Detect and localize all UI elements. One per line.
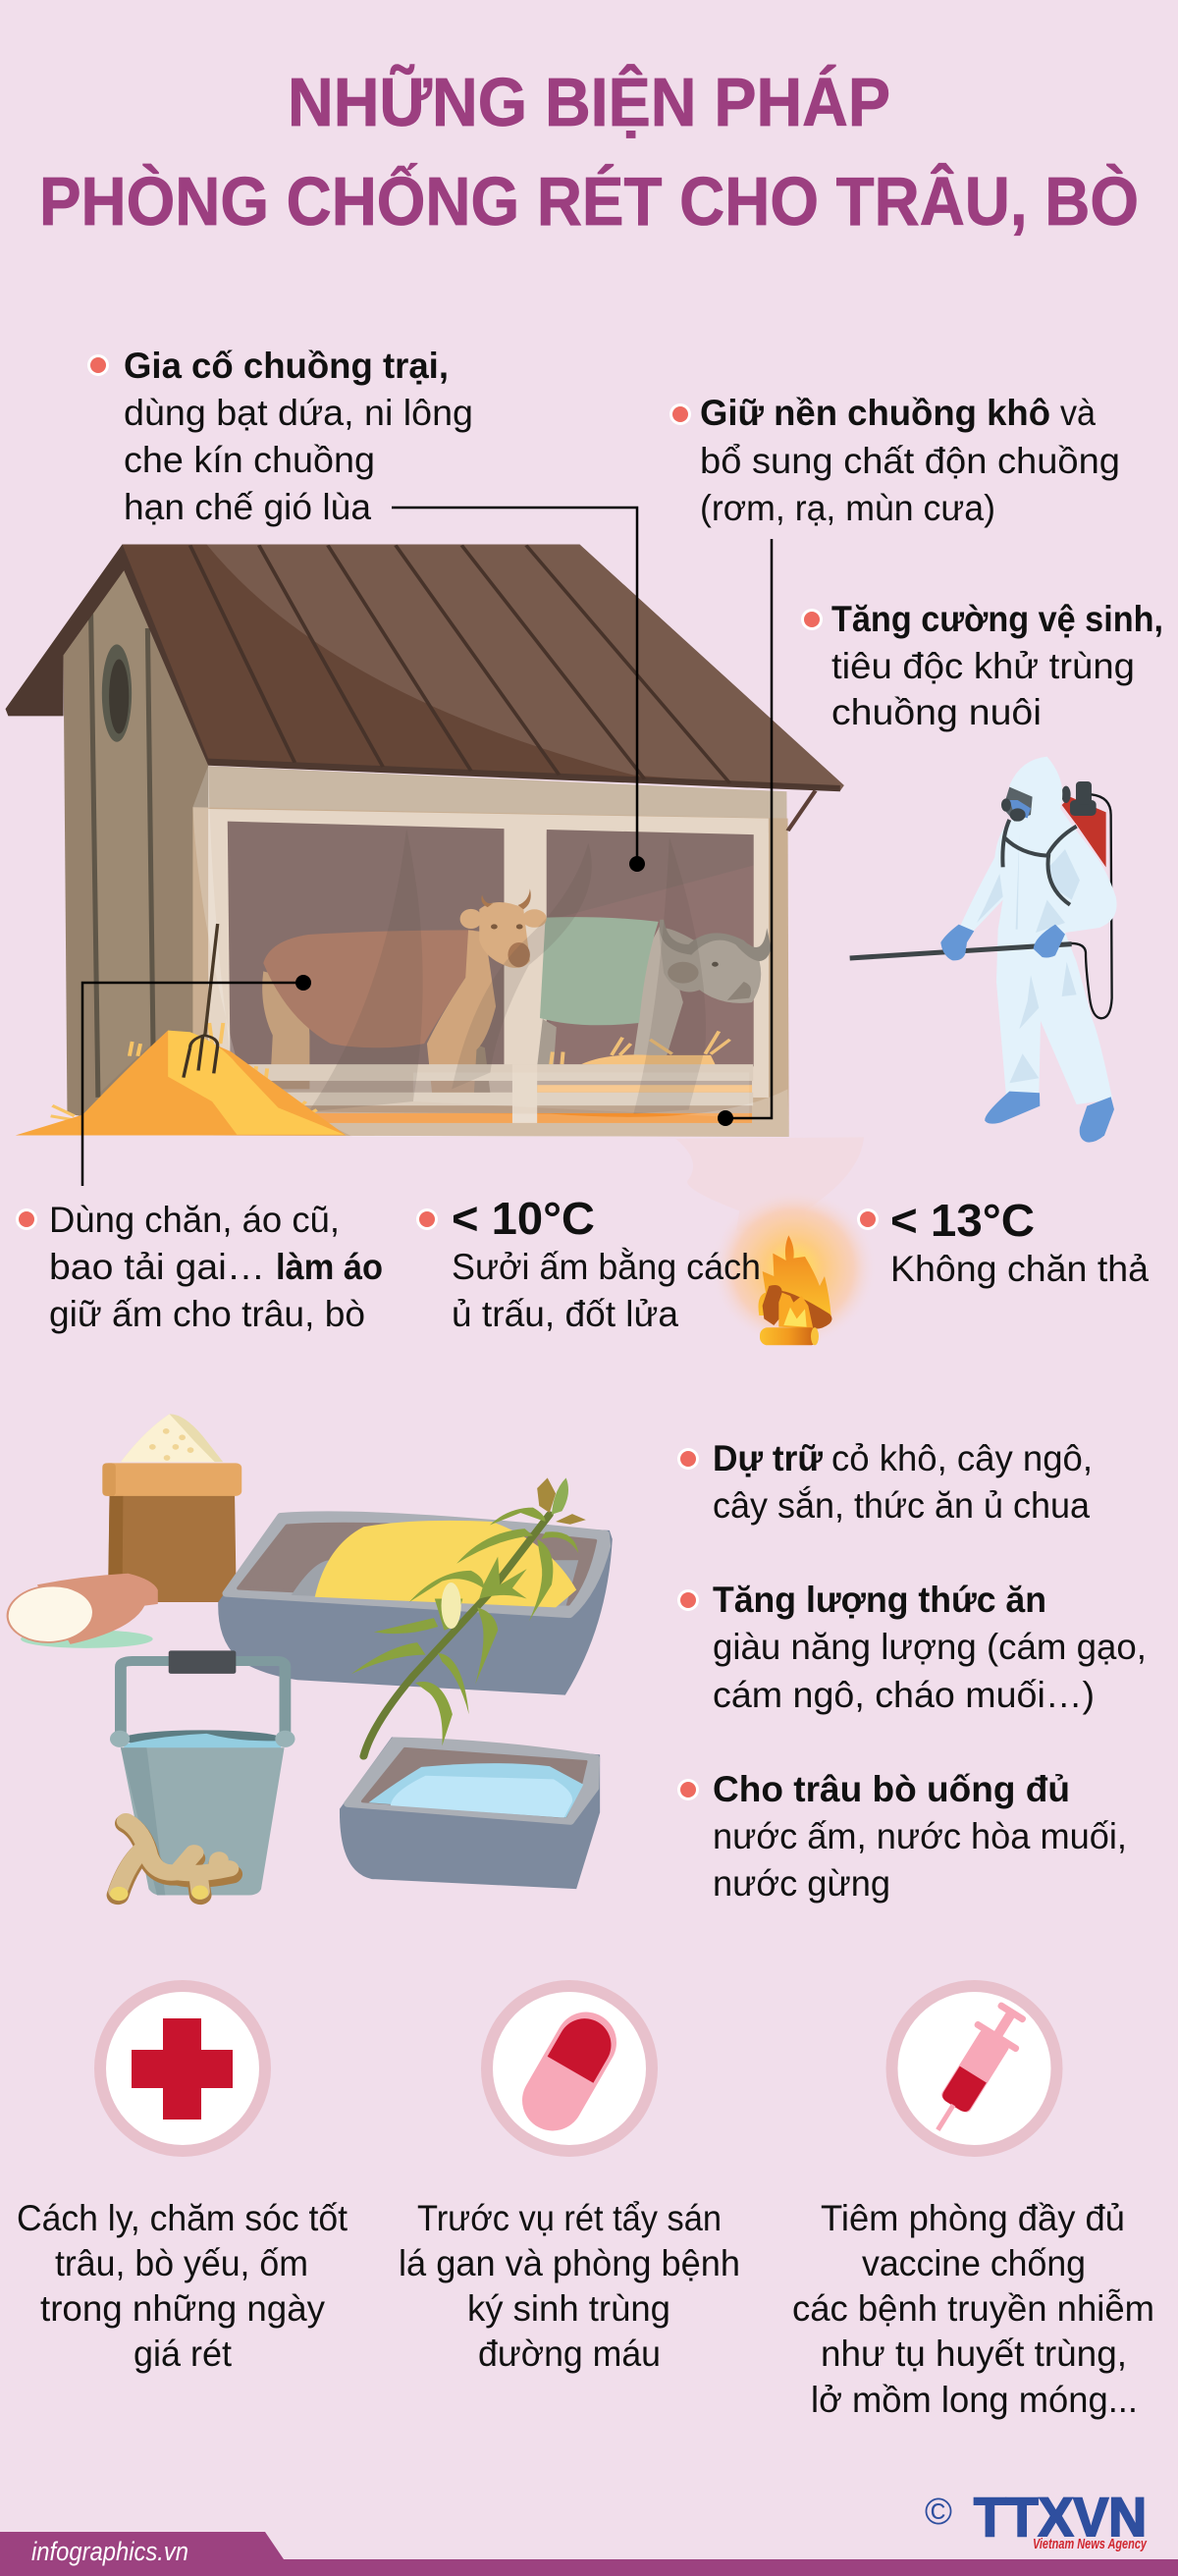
cow <box>262 888 547 1098</box>
glow <box>710 1188 877 1348</box>
mask <box>1003 787 1033 822</box>
large feed tray <box>218 1513 613 1695</box>
connector: reinforce barn <box>392 508 645 872</box>
text: keep floor dry: và <box>1060 393 1096 433</box>
text: reinforce barn: Gia cố chuồng trại, <box>124 346 449 386</box>
text: blankets for animals: bao tải gai… <box>49 1247 265 1287</box>
text: vaccinate: vaccine chống <box>862 2243 1086 2283</box>
text: reinforce barn: dùng bạt dứa, ni lông <box>124 393 473 433</box>
sprayer hose <box>1071 794 1112 1018</box>
text: reinforce barn: hạn chế gió lùa <box>124 487 371 527</box>
title: NHỮNG BIỆN PHÁP <box>288 63 890 140</box>
text: keep floor dry: (rơm, rạ, mùn cưa) <box>700 488 995 528</box>
text: blankets for animals: làm áo <box>276 1247 383 1287</box>
illustration: worker in protective suit spraying <box>850 757 1117 1143</box>
text: blankets for animals <box>16 1200 383 1334</box>
footer bar: infographics.vn <box>31 2537 188 2566</box>
boots <box>985 1092 1040 1124</box>
sweet potato <box>4 1574 158 1648</box>
straw under buffalo <box>581 1054 717 1066</box>
text: deworm: lá gan và phòng bệnh <box>399 2243 740 2283</box>
text: reinforce barn <box>87 346 473 527</box>
barn windows <box>228 822 504 1066</box>
text: sanitation <box>801 599 1163 732</box>
icon: red cross <box>100 1986 265 2151</box>
fence <box>237 1064 753 1123</box>
sack of bran <box>102 1414 241 1602</box>
connector: blankets <box>82 975 311 1186</box>
gloves <box>940 925 974 960</box>
icon: syringe <box>891 1986 1056 2151</box>
text: enough water <box>677 1769 1127 1904</box>
text: deworm: đường máu <box>478 2334 661 2374</box>
text: isolate and care: trâu, bò yếu, ốm <box>55 2243 308 2283</box>
connector: keep floor dry <box>718 539 772 1126</box>
text: below 10 degrees: < 10°C <box>452 1193 595 1244</box>
small water tray <box>340 1737 600 1889</box>
barn side wall <box>64 570 208 1136</box>
logo: TTXVN: TTXVN <box>974 2486 1147 2548</box>
text: sanitation: chuồng nuôi <box>831 692 1042 732</box>
text: below 10 degrees <box>416 1193 761 1334</box>
text: store feed: Dự trữ <box>713 1438 823 1478</box>
sprayer tank <box>1062 797 1106 867</box>
text: store feed: cỏ khô, cây ngô, <box>831 1438 1093 1478</box>
text: isolate and care <box>17 2198 348 2374</box>
text: increase feed <box>677 1580 1147 1715</box>
flames <box>758 1235 831 1315</box>
text: vaccinate: lở mồm long móng... <box>811 2380 1138 2420</box>
barn front <box>208 766 789 1137</box>
text: reinforce barn: che kín chuồng <box>124 440 375 480</box>
illustration: barn with cow and buffalo <box>6 545 844 1137</box>
icon: capsule <box>487 1986 652 2151</box>
text: below 13 degrees: < 13°C <box>890 1195 1035 1246</box>
logo: TTXVN: © <box>925 2492 952 2533</box>
straw pile and fork <box>16 924 346 1136</box>
text: keep floor dry <box>669 393 1120 528</box>
text: deworm <box>399 2198 740 2374</box>
buffalo <box>537 917 772 1066</box>
text: increase feed: cám ngô, cháo muối…) <box>713 1675 1095 1715</box>
title <box>39 63 1139 240</box>
text: enough water: Cho trâu bò uống đủ <box>713 1769 1070 1809</box>
text: sanitation: tiêu độc khử trùng <box>831 646 1135 686</box>
text: blankets for animals: giữ ấm cho trâu, bò <box>49 1294 365 1334</box>
illustration: fire with smoke <box>675 1137 877 1348</box>
text: isolate and care: trong những ngày <box>40 2288 325 2329</box>
text: isolate and care: giá rét <box>134 2334 233 2374</box>
text: increase feed: Tăng lượng thức ăn <box>713 1580 1046 1620</box>
text: blankets for animals: Dùng chăn, áo cũ, <box>49 1200 340 1240</box>
text: deworm: Trước vụ rét tẩy sán <box>417 2198 722 2238</box>
text: keep floor dry: bổ sung chất độn chuồng <box>700 441 1120 481</box>
harness <box>1002 820 1077 905</box>
ginger <box>110 1821 232 1901</box>
text: store feed <box>677 1438 1093 1526</box>
illustration: feed and water <box>4 1414 613 1901</box>
corn plant <box>351 1477 586 1756</box>
logs <box>763 1285 831 1329</box>
text: enough water: nước ấm, nước hòa muối, <box>713 1816 1127 1856</box>
text: isolate and care: Cách ly, chăm sóc tốt <box>17 2198 348 2238</box>
text: increase feed: giàu năng lượng (cám gạo, <box>713 1627 1147 1667</box>
text: vaccinate: Tiêm phòng đầy đủ <box>821 2198 1125 2238</box>
text: deworm: ký sinh trùng <box>467 2288 670 2329</box>
text: below 13 degrees: Không chăn thả <box>890 1249 1149 1289</box>
text: vaccinate: các bệnh truyền nhiễm <box>792 2288 1154 2329</box>
text: vaccinate <box>792 2198 1154 2420</box>
roof <box>6 545 844 790</box>
text: store feed: cây sắn, thức ăn ủ chua <box>713 1485 1090 1526</box>
plastic sheeting <box>192 766 789 1137</box>
text: below 10 degrees: ủ trấu, đốt lửa <box>452 1294 678 1334</box>
footer bar <box>0 2532 1178 2576</box>
smoke <box>675 1137 864 1230</box>
text: keep floor dry: Giữ nền chuồng khô <box>700 393 1050 433</box>
text: enough water: nước gừng <box>713 1863 890 1904</box>
bucket <box>110 1650 295 1896</box>
text: below 10 degrees: Sưởi ấm bằng cách <box>452 1247 761 1287</box>
suit <box>959 757 1117 1104</box>
text: below 13 degrees <box>857 1195 1149 1289</box>
gutter <box>788 790 816 831</box>
text: vaccinate: như tụ huyết trùng, <box>821 2334 1127 2374</box>
spray wand <box>850 944 1072 958</box>
